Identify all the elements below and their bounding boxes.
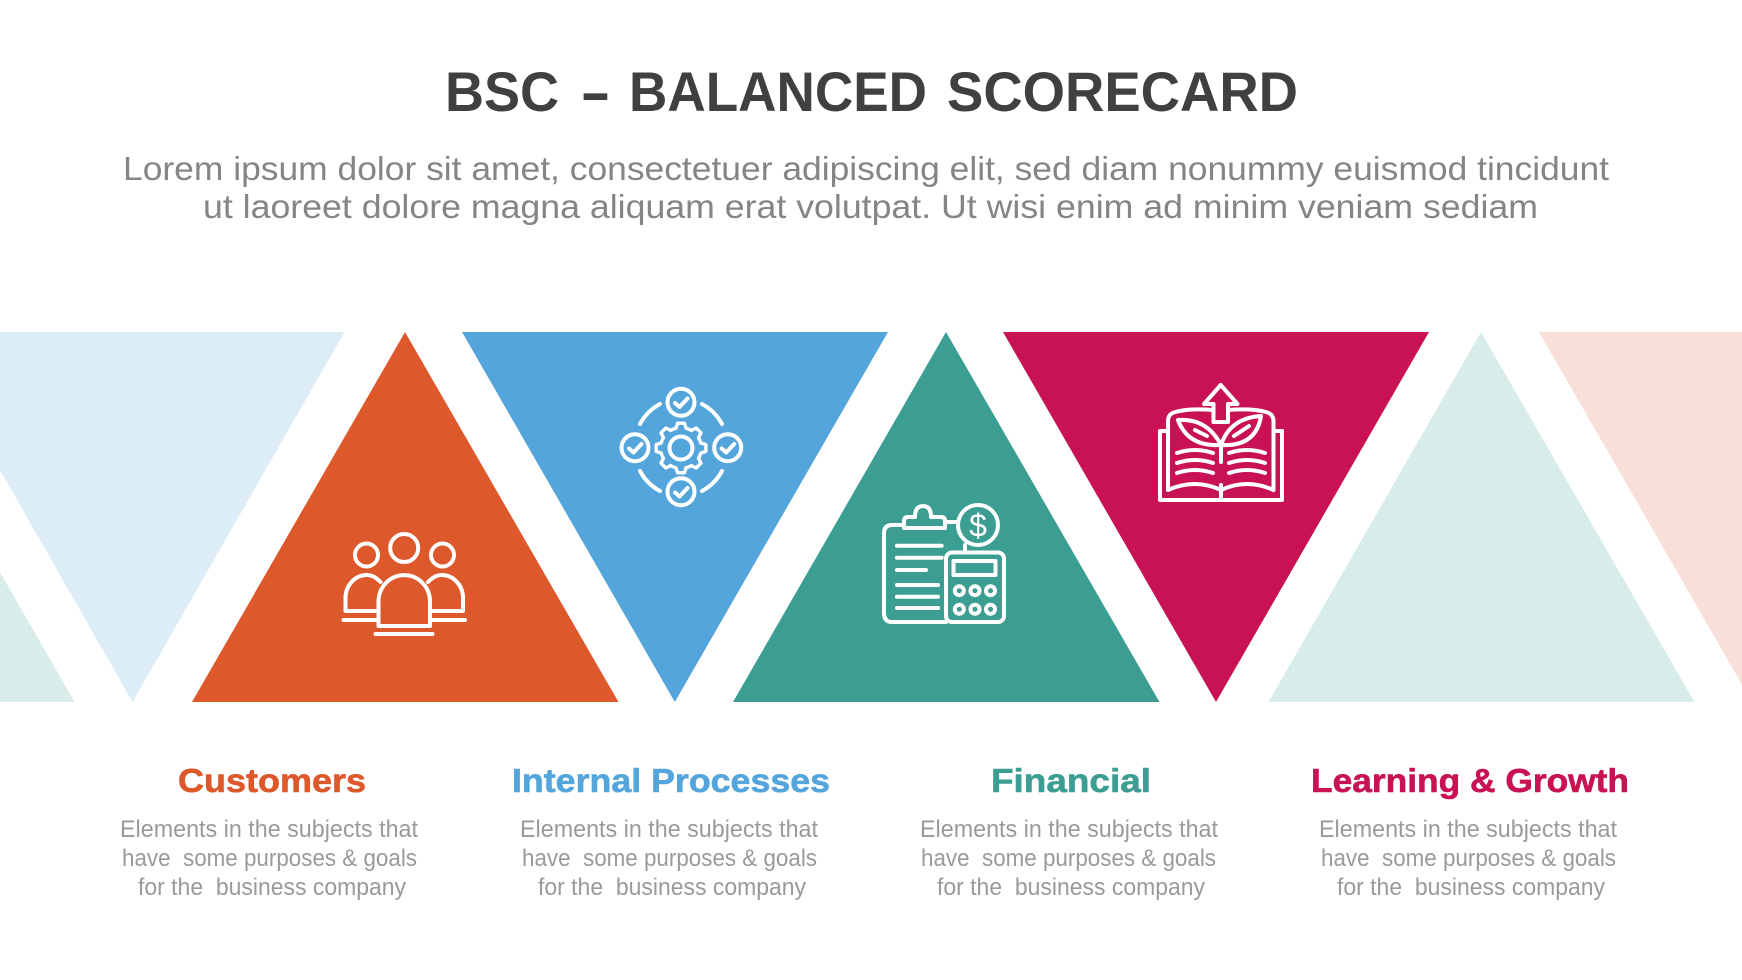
description: customers: for the business company <box>138 874 406 901</box>
description: learning and growth <box>1319 816 1617 901</box>
pale green triangle, right <box>1268 332 1694 702</box>
heading: financial: Financial <box>991 762 1151 799</box>
heading: internal processes: Internal Processes <box>512 762 830 799</box>
title: SCORECARD <box>947 60 1298 123</box>
title: BALANCED <box>629 60 927 123</box>
pale green triangle, left edge <box>0 332 75 702</box>
icon: open book with plant and arrow <box>1160 385 1282 500</box>
orange triangle: customers <box>192 332 618 702</box>
description: financial <box>920 816 1218 901</box>
heading: learning and growth: Learning & Growth <box>1311 762 1629 799</box>
description: learning and growth: for the business company <box>1337 874 1605 901</box>
heading: customers: Customers <box>178 762 366 799</box>
subtitle text <box>123 150 1609 225</box>
description: internal processes <box>520 816 818 901</box>
column: financial <box>920 762 1218 901</box>
column: learning and growth <box>1311 762 1629 901</box>
icon: gear with checkmarks <box>622 389 741 505</box>
description: customers <box>120 816 418 901</box>
icon: clipboard, coin and calculator <box>884 505 1004 622</box>
icon: customers group <box>344 534 465 634</box>
pale peach triangle, right edge <box>1539 332 1742 702</box>
description: internal processes: Elements in the subjects that <box>520 816 818 843</box>
description: financial: for the business company <box>937 874 1205 901</box>
title <box>445 60 1298 123</box>
subtitle text: ut laoreet dolore magna aliquam erat volutpat. Ut wisi enim ad minim veniam sediam <box>203 188 1538 225</box>
title: - <box>580 60 611 123</box>
description: learning and growth: have some purposes & goals <box>1321 845 1616 872</box>
column: internal processes <box>512 762 830 901</box>
red triangle: learning and growth <box>1003 332 1429 702</box>
description: customers: Elements in the subjects that <box>120 816 418 843</box>
description: customers: have some purposes & goals <box>122 845 417 872</box>
description: financial: have some purposes & goals <box>921 845 1216 872</box>
column: customers <box>120 762 418 901</box>
pale blue triangle, left <box>0 332 344 702</box>
title: BSC <box>445 60 559 123</box>
blue triangle: internal processes <box>462 332 888 702</box>
description: learning and growth: Elements in the subjects that <box>1319 816 1617 843</box>
description: financial: Elements in the subjects that <box>920 816 1218 843</box>
icon: clipboard, coin and calculator: $ <box>969 508 987 544</box>
teal triangle: financial <box>733 332 1160 702</box>
description: internal processes: have some purposes & goals <box>522 845 817 872</box>
description: internal processes: for the business company <box>538 874 806 901</box>
subtitle text: Lorem ipsum dolor sit amet, consectetuer adipiscing elit, sed diam nonummy euismod tincidunt <box>123 150 1609 187</box>
